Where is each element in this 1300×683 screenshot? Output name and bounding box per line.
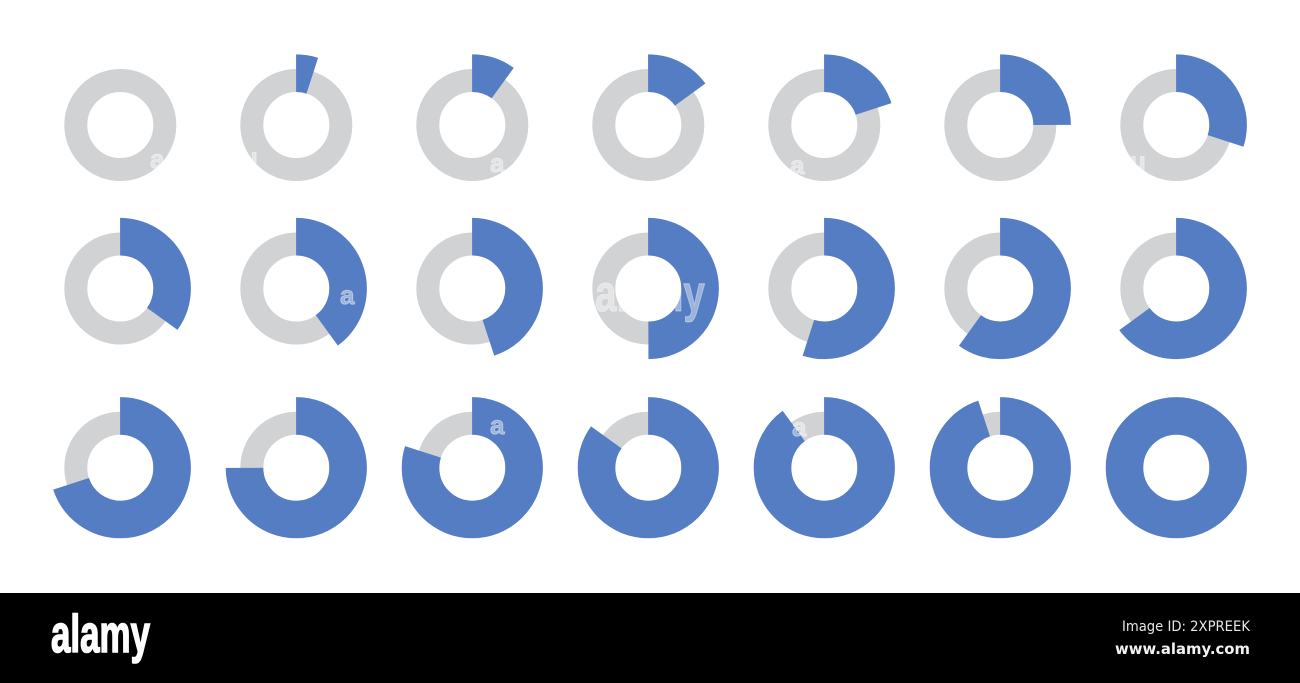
watermark fragments: u [242,142,258,172]
donut 25% [948,73,1052,177]
donut 75% [244,416,348,520]
donut 5% [244,73,348,177]
watermark fragments: a [792,412,807,442]
donut 50% [596,237,700,340]
donut 0% [76,80,165,170]
donut 40% [244,237,348,340]
donut 100% [1124,416,1228,520]
donut 10% [420,73,524,177]
donut 45% [420,237,524,340]
alamy logo: alamy [51,605,150,664]
donut 80% [420,416,524,520]
donut 70% [68,416,172,520]
donut 15% [596,73,700,177]
donut 30% [1124,73,1228,177]
watermark fragments: a [490,410,505,440]
donut 20% [772,73,876,177]
donut 85% [596,416,700,520]
donut 65% [1124,237,1228,340]
footer bar [0,593,1300,683]
watermark fragments: u [1130,146,1146,176]
watermark fragments: a [790,150,805,180]
image id: Image ID: 2XPREEK [1122,619,1251,635]
donut 55% [772,237,876,340]
watermark fragments: a [150,144,165,174]
donut chart grid [68,73,1228,519]
donut 35% [68,237,172,340]
website: www.alamy.com [1115,640,1250,658]
donut 95% [948,416,1052,520]
donut 90% [772,416,876,520]
watermark fragments: a [490,148,505,178]
watermark fragments: alamy [595,265,705,323]
watermark fragments [150,142,1146,442]
watermark fragments: a [340,280,355,310]
donut 60% [948,237,1052,340]
